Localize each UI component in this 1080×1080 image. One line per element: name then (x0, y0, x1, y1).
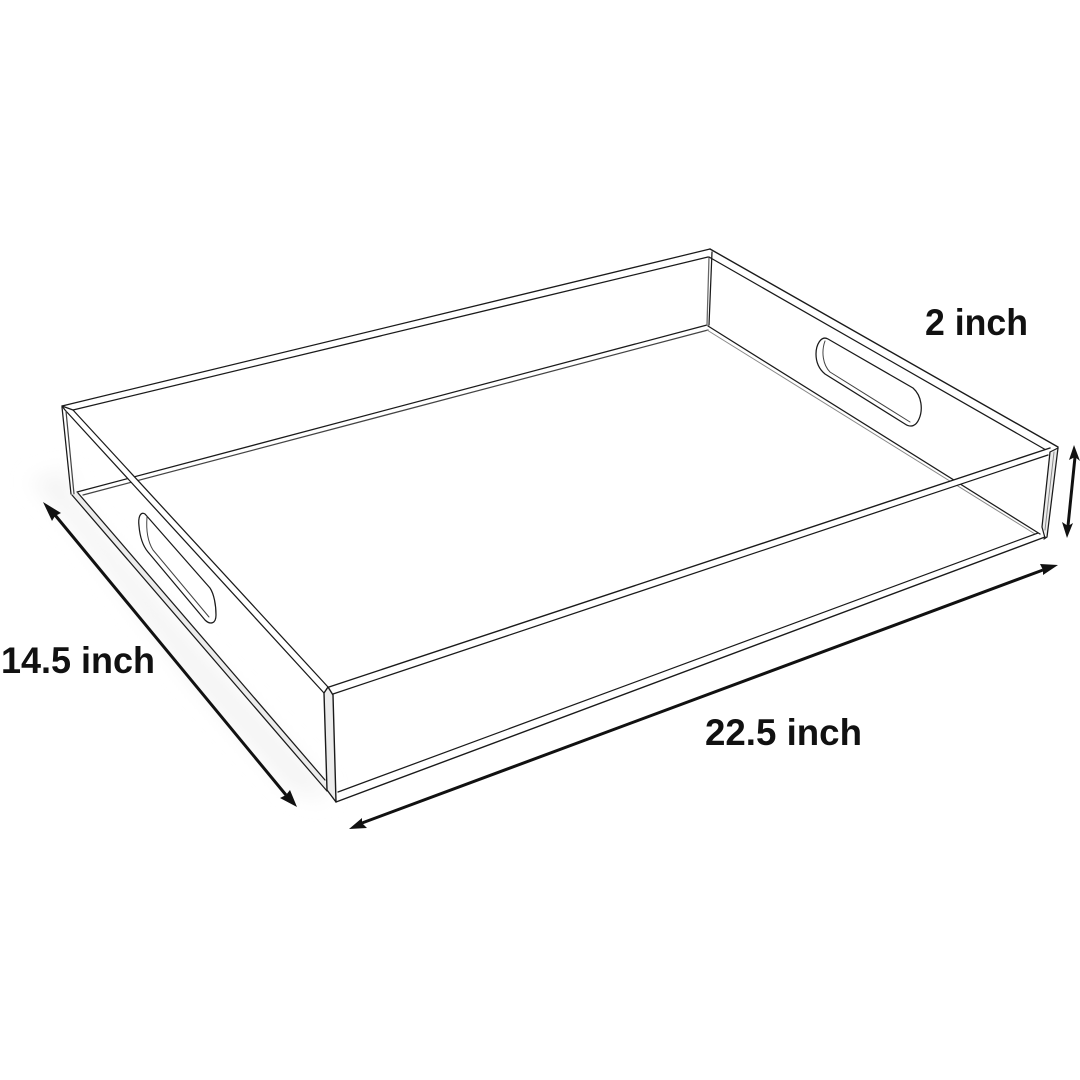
left corner post (62, 407, 74, 494)
tray floor back edges (77, 325, 1040, 534)
front long wall rim (329, 448, 1050, 694)
label: 14.5 inch: 14.5 inch (1, 640, 155, 681)
arrow: 2 inch height (1062, 445, 1080, 538)
soft shadow under tray (30, 470, 325, 800)
back long wall rim (62, 249, 710, 410)
right handle cutout (816, 338, 921, 426)
label: 22.5 inch: 22.5 inch (705, 712, 862, 753)
left handle cutout (139, 513, 216, 623)
arrow: 14.5 inch width (43, 502, 297, 807)
back corner post (707, 252, 712, 325)
arrow: 22.5 inch length (349, 564, 1058, 829)
front wall bottom edge (336, 533, 1045, 802)
label: 2 inch: 2 inch (925, 302, 1028, 343)
tray (62, 249, 1058, 802)
left short wall rim (62, 406, 328, 693)
right short wall rim (709, 249, 1058, 450)
front corner post (324, 687, 336, 802)
right corner post (1042, 448, 1058, 539)
left wall bottom edge (72, 493, 327, 791)
